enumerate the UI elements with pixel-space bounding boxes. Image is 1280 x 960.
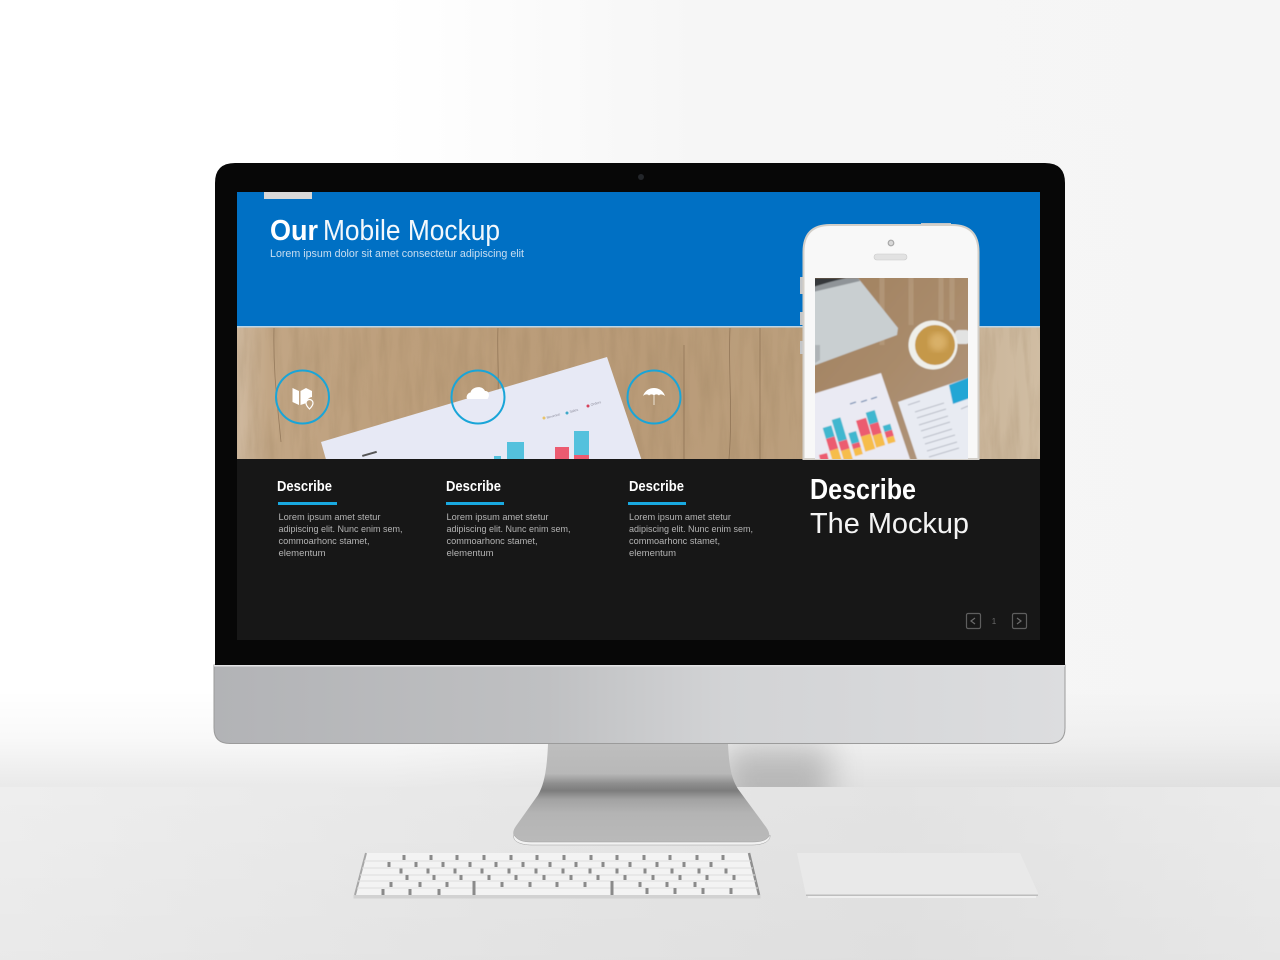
column 3: elementum bbox=[629, 548, 676, 559]
column 2 bbox=[446, 478, 573, 559]
phone chart bars bbox=[819, 410, 896, 463]
monitor bbox=[214, 163, 1065, 744]
background: wall fade bbox=[0, 690, 1280, 787]
icon: map with pin bbox=[276, 370, 329, 424]
column 3: Lorem ipsum amet stetur bbox=[629, 512, 731, 523]
paper chart bbox=[362, 400, 602, 459]
background: table bbox=[0, 787, 1280, 960]
paper chart: Sales bbox=[569, 408, 579, 414]
phone screen photo bbox=[813, 276, 970, 465]
column 2: elementum bbox=[446, 548, 494, 559]
paper with chart bbox=[813, 373, 912, 465]
heading: describe the mockup bbox=[810, 474, 969, 540]
phone mockup bbox=[800, 223, 978, 465]
column 3 bbox=[628, 478, 756, 559]
coffee cup bbox=[955, 330, 970, 344]
heading: describe the mockup: The Mockup bbox=[810, 508, 969, 540]
column 2: Describe bbox=[446, 478, 501, 495]
column 2: adipiscing elit. Nunc enim sem, bbox=[446, 524, 570, 535]
keyboard bbox=[354, 853, 760, 898]
key gaps bbox=[383, 855, 734, 895]
column 1: elementum bbox=[278, 548, 326, 559]
column 3: Describe bbox=[629, 478, 684, 495]
wood cracks bbox=[274, 328, 760, 459]
paper chart: Orders bbox=[590, 400, 602, 407]
icon: umbrella bbox=[628, 370, 680, 424]
screen slide bbox=[237, 192, 1040, 640]
column 1: adipiscing elit. Nunc enim sem, bbox=[278, 524, 402, 535]
phone speaker bbox=[874, 254, 907, 260]
title: Mobile Mockup bbox=[323, 215, 500, 247]
column 2: Lorem ipsum amet stetur bbox=[446, 512, 548, 523]
monitor stand bbox=[513, 744, 770, 845]
pagination: 1 bbox=[992, 617, 997, 626]
paper chart: Revenue bbox=[546, 412, 561, 420]
laptop bbox=[813, 278, 898, 366]
phone body bbox=[804, 225, 978, 459]
panel: wood photo bbox=[237, 326, 1040, 470]
heading: describe the mockup: Describe bbox=[810, 474, 916, 506]
monitor bezel bbox=[215, 163, 1065, 665]
monitor chin bbox=[214, 665, 1065, 744]
column 1 bbox=[277, 478, 405, 559]
column 1: Describe bbox=[277, 478, 332, 495]
phone chart legend bbox=[850, 397, 877, 404]
phone buttons bbox=[800, 223, 951, 354]
column 3: adipiscing elit. Nunc enim sem, bbox=[629, 524, 753, 535]
blue label on paper bbox=[949, 377, 970, 404]
panel: dark footer bbox=[237, 459, 1040, 640]
header tab bbox=[264, 192, 312, 199]
chin highlight bbox=[214, 665, 1065, 666]
trackpad bbox=[797, 853, 1038, 898]
column 1: commoarhonc stamet, bbox=[278, 536, 370, 547]
column 2: commoarhonc stamet, bbox=[446, 536, 538, 547]
background: table fade bbox=[0, 787, 1280, 960]
title: Our bbox=[270, 215, 318, 247]
phone camera bbox=[888, 240, 894, 246]
paper document bbox=[321, 357, 642, 459]
webcam bbox=[638, 174, 644, 180]
paper with text bbox=[898, 377, 970, 465]
panel: blue header bbox=[237, 192, 1040, 326]
column 3: commoarhonc stamet, bbox=[629, 536, 720, 547]
key rows bbox=[357, 861, 758, 888]
subtitle: Lorem ipsum dolor sit amet consectetur adipiscing elit bbox=[270, 248, 524, 260]
background: stand shadow on wall bbox=[728, 744, 844, 787]
phone text lines bbox=[908, 401, 968, 457]
column 1: Lorem ipsum amet stetur bbox=[278, 512, 380, 523]
pagination bbox=[966, 614, 1026, 628]
icon: cloud bbox=[452, 370, 504, 424]
